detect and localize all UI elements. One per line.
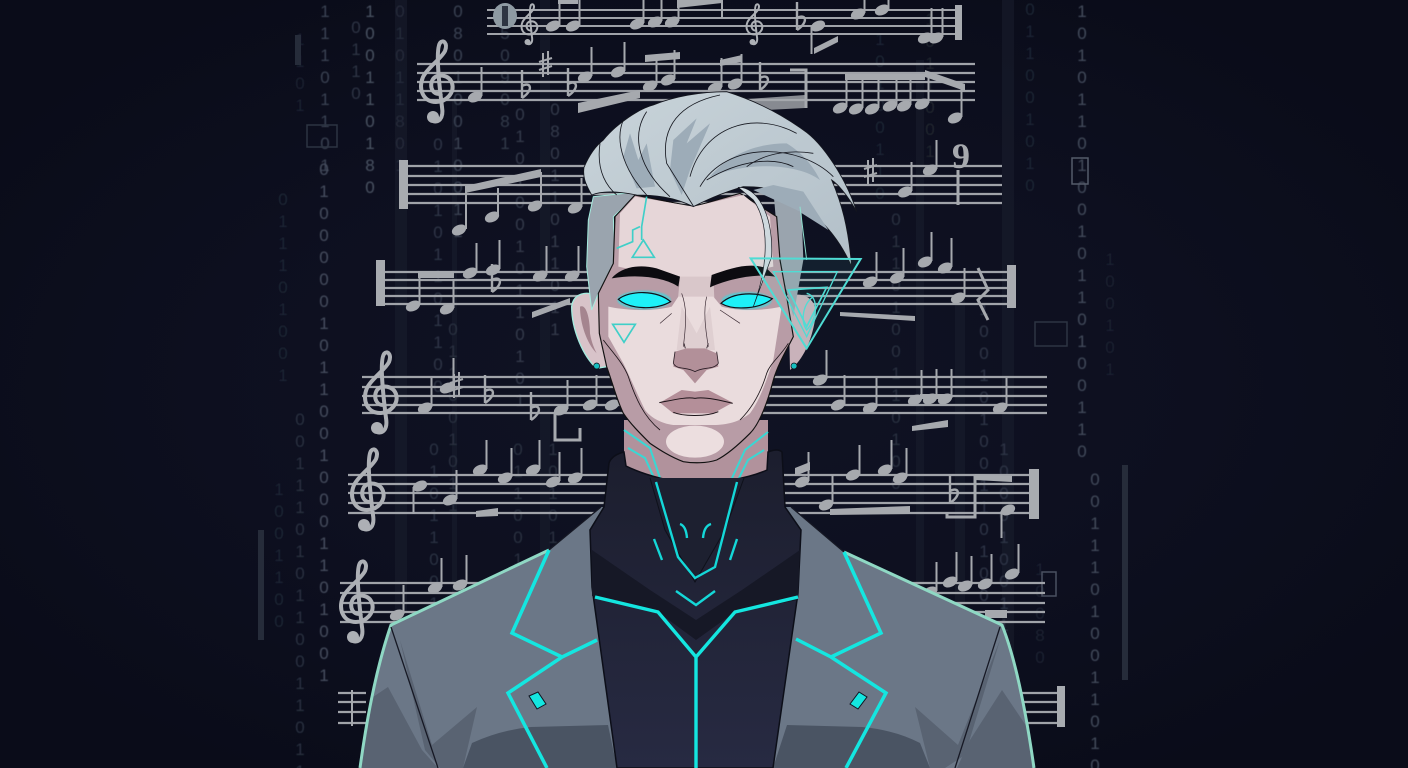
binary code rain columns: 1001100 xyxy=(270,480,288,634)
lower face light xyxy=(608,297,782,425)
binary code rain columns: 100101 xyxy=(1100,250,1120,382)
binary code rain columns: 011101001 xyxy=(274,190,292,388)
faint vertical data bands xyxy=(395,0,1014,768)
binary code rain columns: 10010100110100 xyxy=(974,300,994,608)
binary code rain columns: 1101 xyxy=(290,30,310,118)
nose side shading xyxy=(677,307,715,350)
right ear xyxy=(788,295,816,370)
right eye xyxy=(721,294,772,308)
side hair xyxy=(587,192,640,310)
binary code rain columns: 100110180 xyxy=(360,2,380,200)
right eye glow xyxy=(722,292,772,309)
binary code rain columns: 011001101 xyxy=(508,440,528,638)
binary code rain columns: 010101101100 xyxy=(428,135,448,399)
face base xyxy=(598,193,793,463)
binary code rain columns: 01011801 xyxy=(390,2,410,178)
binary code rain columns: 10080 xyxy=(1030,560,1050,670)
sleeve fold lines xyxy=(391,507,1000,768)
collar fold xyxy=(592,550,800,640)
binary code rain columns: 01010010110101 xyxy=(510,105,530,413)
loose forelock xyxy=(738,187,772,307)
figure: neck xyxy=(624,420,768,492)
collar cyan trim xyxy=(654,482,737,605)
holographic triangles xyxy=(751,258,861,348)
forehead circuit and triangle xyxy=(617,197,654,257)
hair strands xyxy=(599,95,833,206)
staff 7 xyxy=(340,544,1045,643)
binary code rain columns: 010000010110010001101001 xyxy=(314,160,334,688)
staff 2 xyxy=(417,41,975,126)
binary code rain columns: 1011001 xyxy=(920,10,940,164)
right earring xyxy=(791,363,797,369)
nose bridge lines xyxy=(660,293,740,347)
left lapel cyan trim xyxy=(508,550,597,768)
shoulder mint edge xyxy=(360,550,1034,768)
staff 8 xyxy=(338,686,1065,727)
binary code rain columns: 11101101 xyxy=(316,2,334,178)
binary code rain columns: 101011010010110100110 xyxy=(1072,2,1092,464)
left ear xyxy=(572,293,607,368)
hair xyxy=(584,92,857,267)
small glitch blocks xyxy=(258,35,1128,680)
neck cyan lines xyxy=(624,430,768,480)
binary code rain columns xyxy=(270,0,1120,768)
left eye xyxy=(618,293,671,308)
sleeve shading xyxy=(361,640,1032,768)
chin highlight xyxy=(666,426,724,458)
binary code rain columns: 08011011011 xyxy=(546,100,564,342)
staff 3: 9 xyxy=(952,136,970,176)
binary code rain columns: 010110010 xyxy=(424,440,444,638)
left earring xyxy=(594,363,600,369)
staff 1 xyxy=(487,0,962,54)
binary code rain columns: 011001010 xyxy=(1020,0,1040,198)
Y shaped chest trim xyxy=(595,597,798,768)
left eyebrow xyxy=(612,266,680,287)
jaw lines xyxy=(603,340,788,430)
binary code rain columns: 011001011 xyxy=(444,320,462,518)
staff 6 xyxy=(348,440,1039,538)
hair shading spikes xyxy=(623,118,828,230)
left eye glow xyxy=(617,291,671,309)
staff 5 xyxy=(362,350,1047,440)
binary code rain columns: 100010011 xyxy=(994,440,1014,638)
figure: shirt and turtleneck xyxy=(590,450,801,768)
binary code rain columns: 0509081 xyxy=(496,2,514,156)
lips xyxy=(660,390,733,413)
sheet music staves xyxy=(338,0,1065,727)
right lapel cyan trim xyxy=(796,552,886,768)
binary code rain columns: 10100110 xyxy=(870,30,890,206)
nose bridge light xyxy=(677,277,715,313)
staff 3 xyxy=(399,136,1002,238)
binary code rain columns: 08010010011 xyxy=(448,2,468,244)
binary code rain columns: 0110 xyxy=(346,18,366,106)
figure: head (zoom coordinates) xyxy=(572,92,861,463)
right eyebrow xyxy=(710,266,775,287)
side hair mint edge xyxy=(800,207,807,260)
cheek triangle xyxy=(613,324,635,342)
figure: jacket xyxy=(360,507,1034,768)
binary code rain columns: 0110100110100 xyxy=(886,210,906,496)
binary code rain columns: 1010100 xyxy=(544,440,562,594)
forehead light xyxy=(618,195,773,280)
lapel buttons xyxy=(529,692,867,709)
staff 4 xyxy=(376,232,1016,321)
nose xyxy=(673,348,718,383)
jacket shadow areas xyxy=(463,725,930,768)
